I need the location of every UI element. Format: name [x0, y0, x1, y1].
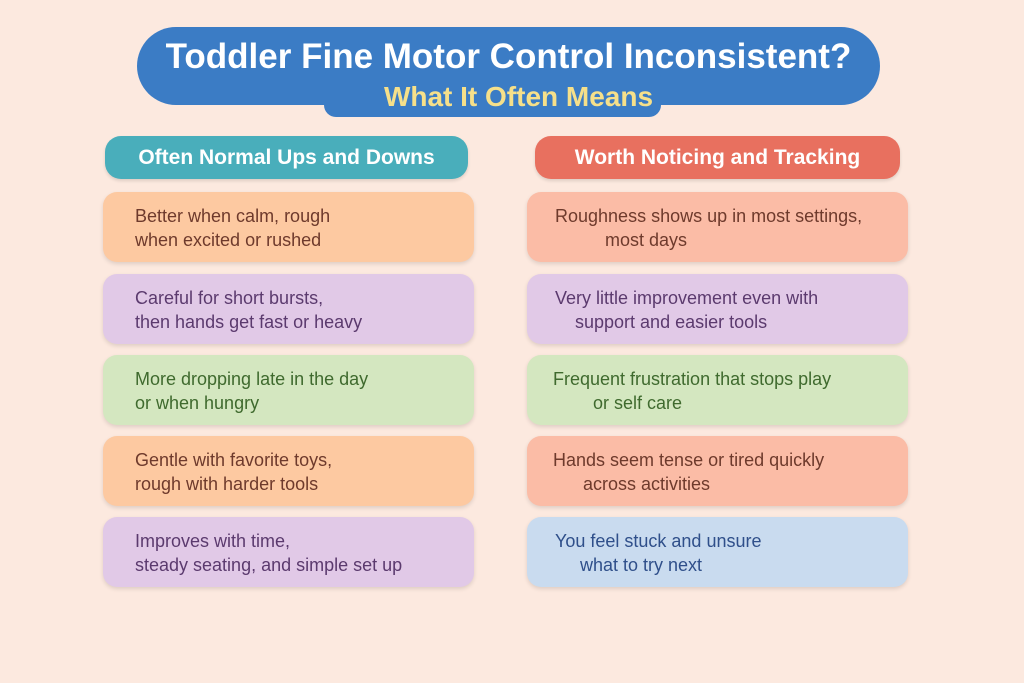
card L2: Careful for short bursts,: [135, 288, 323, 308]
card R3: [527, 355, 908, 425]
card L4: [103, 436, 474, 506]
card L5: Improves with time,: [135, 531, 290, 551]
card R2: Very little improvement even with: [555, 288, 818, 308]
header: often normal: Often Normal Ups and Downs: [138, 146, 435, 168]
header: worth noticing: [535, 136, 900, 179]
card R5: what to try next: [580, 555, 702, 575]
card R2: [527, 274, 908, 344]
title banner: [137, 27, 880, 117]
card L5: steady seating, and simple set up: [135, 555, 402, 575]
card L3: [103, 355, 474, 425]
card R2: support and easier tools: [575, 312, 767, 332]
card R5: [527, 517, 908, 587]
card L3: More dropping late in the day: [135, 369, 368, 389]
card R5: You feel stuck and unsure: [555, 531, 761, 551]
card R4: Hands seem tense or tired quickly: [553, 450, 824, 470]
card R4: [527, 436, 908, 506]
card L3: or when hungry: [135, 393, 259, 413]
card R3: Frequent frustration that stops play: [553, 369, 831, 389]
card L1: [103, 192, 474, 262]
card L5: [103, 517, 474, 587]
title text: Toddler Fine Motor Control Inconsistent?: [166, 37, 851, 76]
card L4: rough with harder tools: [135, 474, 318, 494]
card L4: Gentle with favorite toys,: [135, 450, 332, 470]
card L1: Better when calm, rough: [135, 206, 330, 226]
card L2: [103, 274, 474, 344]
card R4: across activities: [583, 474, 710, 494]
card R1: most days: [605, 230, 687, 250]
card R3: or self care: [593, 393, 682, 413]
card L2: then hands get fast or heavy: [135, 312, 362, 332]
subtitle: What It Often Means: [384, 81, 653, 112]
header: often normal: [105, 136, 468, 179]
card R1: Roughness shows up in most settings,: [555, 206, 862, 226]
header: worth noticing: Worth Noticing and Tracking: [575, 146, 860, 168]
card L1: when excited or rushed: [135, 230, 321, 250]
card R1: [527, 192, 908, 262]
